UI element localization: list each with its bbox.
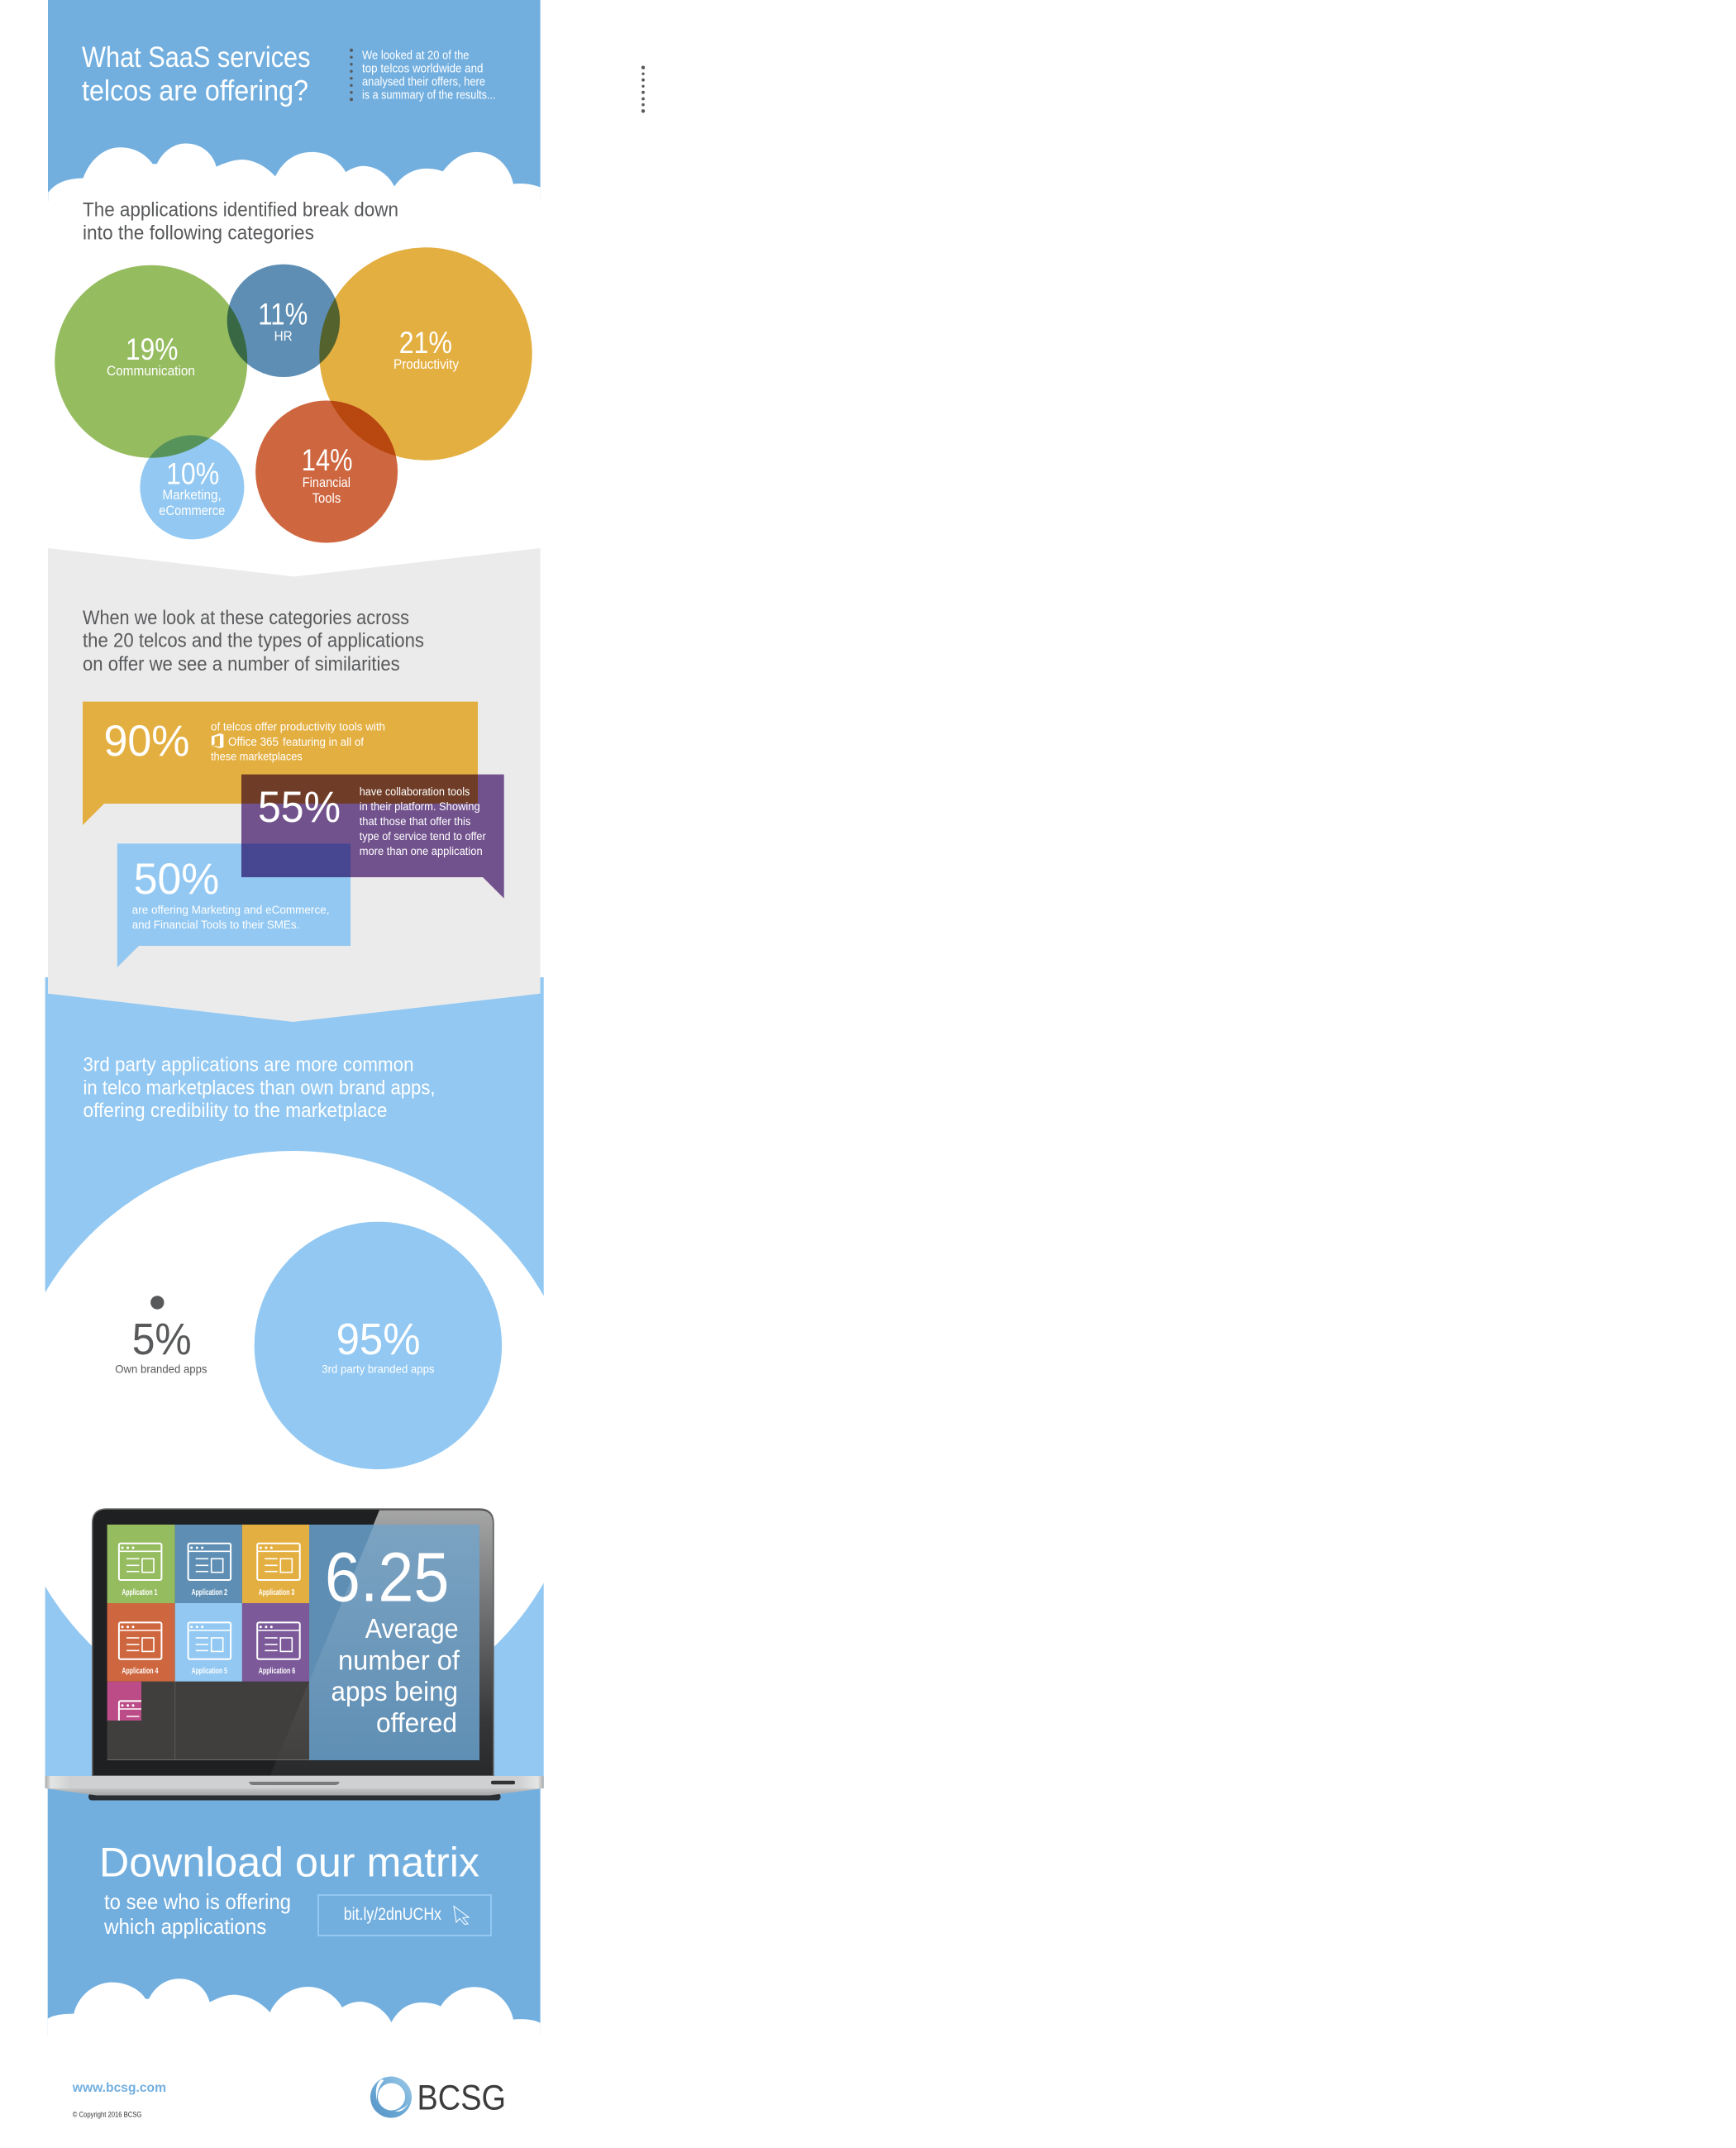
bubble: productivity: [319, 247, 532, 461]
bubble: financial tools: [255, 400, 398, 542]
callout shape: 90%: [83, 702, 478, 825]
callout text: 55%: more than one application: [360, 845, 483, 857]
intro text: analysed their offers, here: [362, 76, 485, 89]
title: What SaaS services: [82, 41, 311, 74]
stat: 95% third party: [255, 1222, 502, 1469]
laptop base lower: [45, 1788, 544, 1796]
title: telcos are offering?: [82, 74, 308, 107]
third party heading: in telco marketplaces than own brand apps,: [83, 1076, 435, 1099]
link button: [318, 1895, 491, 1936]
intro text: top telcos worldwide and: [362, 63, 483, 76]
stat: 5% own branded: [115, 1296, 207, 1375]
callout text: 50%: 50%: [134, 855, 219, 904]
stat: 5% own branded: Own branded apps: [115, 1362, 207, 1375]
app tile 1: Application 1: [122, 1587, 157, 1597]
laptop: [45, 1509, 544, 1801]
BCSG logo: [370, 2077, 506, 2118]
app tile 3: [242, 1525, 309, 1603]
callout text: 55%: type of service tend to offer: [360, 830, 486, 842]
header panel: [48, 0, 541, 204]
similarities panel: [48, 548, 541, 1022]
third party heading: 3rd party applications are more common: [83, 1053, 413, 1076]
app tile 3: Application 3: [259, 1587, 294, 1597]
average number: 6.25: [325, 1539, 449, 1616]
callout text: 55%: [258, 783, 486, 857]
callout text: 90%: 90%: [104, 717, 190, 766]
similarities heading: on offer we see a number of similarities: [83, 653, 400, 675]
app tile 7 partial: [107, 1682, 141, 1721]
clouds: footer: [48, 1979, 541, 2040]
categories heading: into the following categories: [83, 222, 314, 244]
similarities heading: the 20 telcos and the types of applications: [83, 630, 424, 652]
label: 21% productivity: [393, 326, 460, 372]
callout text: 90%: [104, 717, 385, 766]
laptop screen: [107, 1525, 479, 1760]
callout text: 55%: have collaboration tools: [360, 785, 470, 798]
callout text: 50%: and Financial Tools to their SMEs.: [132, 919, 299, 931]
callout text: 55%: 55%: [258, 783, 341, 832]
icon: cursor: [454, 1907, 469, 1925]
lid glare: [269, 1510, 493, 1776]
label: 11% HR: 11%: [258, 298, 308, 331]
download heading: Download our matrix: [99, 1839, 479, 1885]
bubble chart: categories: [55, 247, 532, 542]
callout shape: 50%: [117, 843, 351, 967]
intro text: is a summary of the results...: [362, 88, 496, 102]
label: 21% productivity: Productivity: [393, 357, 460, 372]
laptop port: [491, 1781, 515, 1784]
categories heading: The applications identified break down: [83, 198, 398, 222]
app tile 5: [175, 1603, 242, 1682]
download subtext: to see who is offering: [104, 1889, 291, 1914]
callout text: 90%: of telcos offer productivity tools with: [211, 720, 385, 733]
label: 14% financial tools: Financial: [303, 475, 351, 490]
callout text: 55%: that those that offer this: [360, 815, 471, 828]
average caption: apps being: [331, 1676, 458, 1706]
laptop base: [45, 1776, 544, 1788]
website link: www.bcsg.com: [72, 2081, 166, 2095]
label: 19% communication: Communication: [107, 364, 195, 379]
stat: 95% third party: 3rd party branded apps: [322, 1362, 435, 1375]
label: 10% marketing: Marketing,: [162, 488, 222, 503]
similarities heading: When we look at these categories across: [83, 607, 409, 629]
app tile 4: Application 4: [122, 1666, 158, 1676]
download subtext: which applications: [103, 1914, 266, 1939]
white arc: [5, 1151, 582, 1728]
laptop lid: [93, 1509, 494, 1776]
app tile 1: [107, 1525, 175, 1603]
callout text: 55%: in their platform. Showing: [360, 800, 480, 813]
label: 10% marketing: 10%: [166, 456, 219, 490]
label: 10% marketing: [159, 456, 225, 518]
label: 19% communication: 19%: [126, 332, 179, 366]
third party panel background: [45, 977, 544, 1788]
average caption: Average: [365, 1613, 459, 1644]
intro text: We looked at 20 of the: [362, 50, 470, 63]
logo wordmark: BCSG: [417, 2079, 506, 2118]
app tile 5: Application 5: [192, 1666, 227, 1676]
logo ring: [370, 2077, 412, 2118]
label: 11% HR: [258, 298, 308, 344]
label: 14% financial tools: Tools: [312, 491, 341, 506]
stat: 5% own branded: 5%: [132, 1315, 192, 1364]
link button: bit.ly/2dnUCHx: [344, 1905, 441, 1924]
app tile 6: Application 6: [259, 1666, 295, 1676]
icon: Office logo: [212, 733, 223, 748]
copyright: © Copyright 2016 BCSG: [73, 2111, 141, 2120]
callout text: 90%: Office 365: [228, 735, 279, 749]
callout text: 50%: [132, 855, 329, 931]
callout shape: 55%: [241, 775, 504, 899]
label: 19% communication: [107, 332, 195, 379]
download panel: [48, 1788, 541, 2040]
stat: 95% third party: 95%: [336, 1315, 421, 1364]
callout text: 90%: featuring in all of: [283, 736, 364, 748]
app tile 4: [107, 1603, 175, 1682]
laptop notch: [249, 1782, 340, 1785]
callout text: 90%: these marketplaces: [211, 750, 303, 762]
average panel: [309, 1525, 479, 1760]
average caption: number of: [338, 1644, 460, 1675]
average caption: offered: [376, 1707, 457, 1738]
bubble: communication: [55, 265, 247, 458]
label: 14% financial tools: [302, 443, 352, 506]
label: 14% financial tools: 14%: [302, 443, 352, 477]
bubble: marketing: [140, 435, 244, 539]
label: 21% productivity: 21%: [399, 326, 452, 360]
app tile 6: [242, 1603, 309, 1682]
callout text: 50%: are offering Marketing and eCommerce,: [132, 904, 329, 916]
clouds: header: [48, 143, 541, 204]
dotted divider: [350, 49, 353, 101]
label: 11% HR: HR: [274, 329, 293, 344]
label: 10% marketing: eCommerce: [159, 504, 225, 518]
bubble: HR: [227, 265, 340, 377]
third party heading: offering credibility to the marketplace: [83, 1100, 387, 1122]
stray dotted line: [641, 66, 645, 112]
app tile 2: [175, 1525, 242, 1603]
laptop shadow: [88, 1793, 501, 1801]
app tile 2: Application 2: [192, 1587, 227, 1597]
